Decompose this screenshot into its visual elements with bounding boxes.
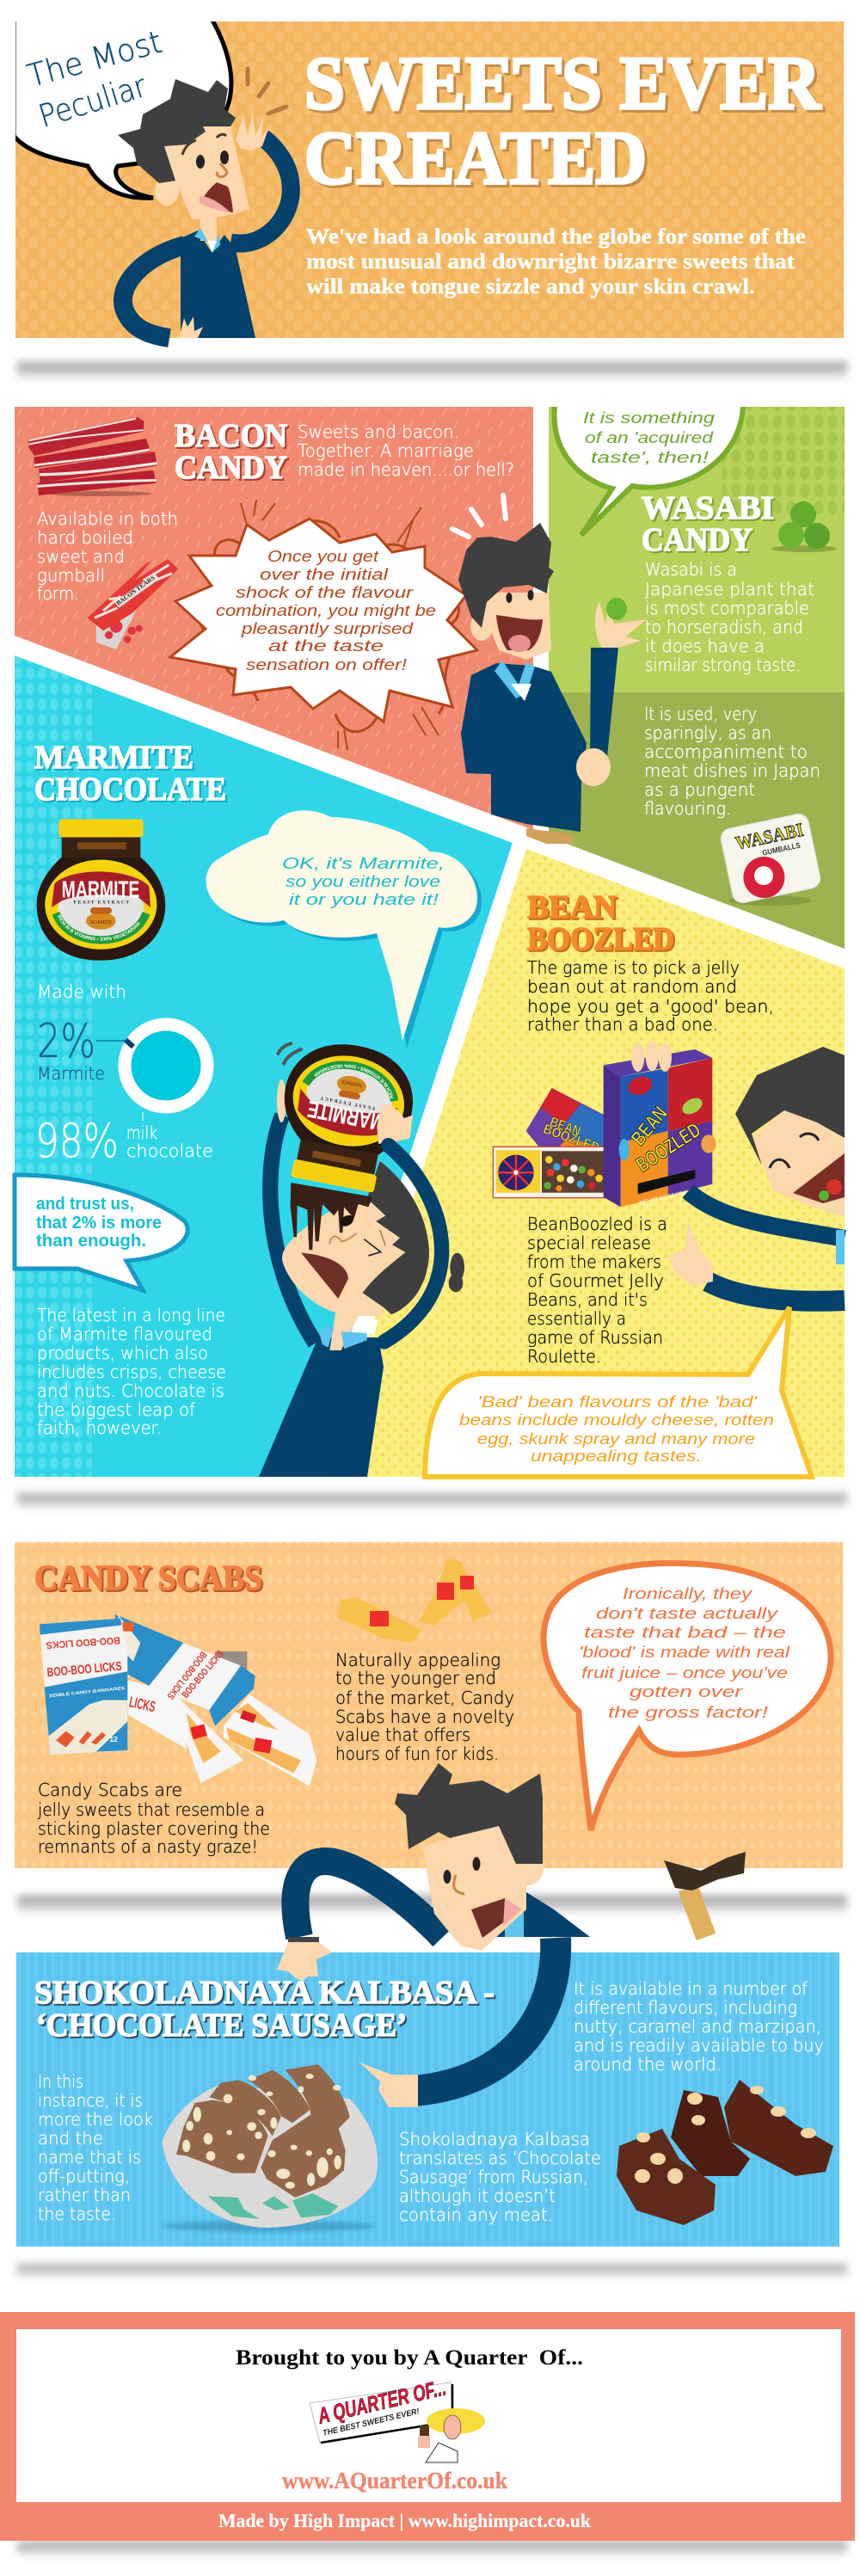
character: surprised man	[118, 79, 291, 338]
image: boo-boo licks box	[40, 1614, 316, 1786]
intro text: will make tongue sizzle and your skin crawl.	[306, 275, 755, 298]
text: latest in a long line	[37, 1305, 226, 1438]
image: inverted marmite jar	[284, 1044, 413, 1192]
heading: wasabi candy: WASABI	[642, 490, 774, 526]
text: available in flavours: around the world.	[574, 2054, 722, 2075]
stat: 98 percent milk chocolate	[35, 1114, 213, 1168]
game tray	[493, 1147, 606, 1198]
text: available in flavours: and is readily available to buy	[574, 2035, 824, 2056]
shadow: header panel	[17, 362, 847, 381]
image: inverted marmite jar: YEAST EXTRACT	[320, 1095, 376, 1110]
image: boo-boo licks box: BOO-BOO LICKS	[164, 1649, 208, 1701]
panel: candy scabs	[15, 1542, 843, 1868]
heading: bacon candy	[175, 418, 287, 486]
text: wasabi description: similar strong taste.	[645, 655, 801, 675]
label: the most: The Most	[24, 25, 166, 95]
text: candy scabs are: Candy Scabs are	[38, 1780, 182, 1800]
text: beanboozled special release: Beans, and it's	[527, 1289, 648, 1310]
image: boo-boo licks box: 12	[109, 1735, 118, 1743]
credit: made by high impact: Made by High Impact | www.highimpact.co.uk	[218, 2510, 592, 2531]
text: available in both: hard boiled	[37, 527, 133, 548]
text: shokoladnaya translation: translates as ‘Chocolate	[399, 2148, 601, 2168]
text: beanboozled special release	[527, 1214, 667, 1367]
panel: header	[14, 17, 844, 338]
text: shokoladnaya translation	[399, 2129, 601, 2225]
panel: bacon candy background	[15, 407, 533, 830]
text: made with: Made with	[37, 981, 126, 1002]
text: wasabi description: Wasabi is a	[645, 559, 737, 580]
tall box: BEAN	[627, 1103, 673, 1150]
callout: marmite cloud	[206, 810, 482, 1048]
text: available in both: Available in both	[37, 508, 178, 529]
text: candy scabs are: sticking plaster covering the	[38, 1818, 270, 1839]
text: in this instance: the taste.	[38, 2204, 116, 2224]
text: naturally appealing: hours of fun for kids.	[335, 1743, 499, 1764]
small box: BOOZLED	[541, 1122, 601, 1156]
text: latest in a long line: faith, however.	[37, 1417, 162, 1438]
tall box: BOOZLED	[632, 1118, 705, 1177]
text: available in flavours	[574, 1978, 824, 2075]
callout: ironically	[544, 1564, 831, 1830]
text: the game is	[527, 957, 774, 1035]
image: boo-boo licks box: BOO-BOO LICKS	[46, 1660, 122, 1680]
heading: bean boozled: BOOZLED	[527, 921, 674, 957]
heading: brought to you by: Brought to you by A Quarter Of...	[236, 2346, 583, 2370]
callout: starburst once you get over	[170, 500, 477, 750]
image: wasabi peas	[771, 501, 837, 552]
text: available in both: sweet and	[37, 546, 125, 567]
shadow: comic panel	[17, 1494, 847, 1509]
callout: ironically: the gross factor!	[608, 1704, 768, 1721]
text: in this instance	[38, 2071, 153, 2224]
text: the game is: hope you get a 'good' bean,	[527, 996, 774, 1017]
icon: shock lines	[248, 69, 286, 114]
gray interior	[215, 1651, 247, 1671]
logo: a quarter of: A QUARTER OF...	[315, 2374, 448, 2429]
text: latest in a long line: includes crisps, cheese	[37, 1362, 226, 1382]
callout: ironically: fruit juice – once you've	[581, 1664, 788, 1681]
image: marmite jar: YEAST EXTRACT	[73, 901, 129, 906]
right leg	[688, 1888, 706, 1937]
text: wasabi usage	[644, 704, 820, 819]
text: shokoladnaya translation: contain any meat.	[399, 2204, 553, 2225]
heading: bacon candy: CANDY	[175, 450, 287, 486]
text: naturally appealing	[335, 1650, 514, 1764]
text: naturally appealing: Naturally appealing	[335, 1650, 501, 1670]
text: in this instance: and the	[38, 2128, 103, 2149]
image: wasabi gumballs tin: GUMBALLS	[761, 841, 802, 858]
chart: 2 percent donut	[96, 1024, 207, 1121]
title	[304, 42, 821, 200]
text: the game is: The game is to pick a jelly	[527, 957, 740, 978]
callout: and trust us	[15, 1175, 187, 1290]
text: sweets and bacon: made in heaven....or hell?	[298, 459, 514, 480]
callout: bad bean flavours: 'Bad' bean flavours of the 'bad'	[477, 1393, 758, 1411]
shadow: footer panel	[17, 2542, 847, 2557]
icon: excitement lines	[452, 495, 506, 537]
image: marmite jar: MARMITE	[62, 876, 139, 902]
text: latest in a long line: and nuts. Chocolate is	[37, 1380, 224, 1401]
heading: bean boozled: BEAN	[527, 889, 617, 925]
callout: bad bean flavours: egg, skunk spray and many more	[477, 1430, 755, 1448]
text: beanboozled special release: essentially a	[527, 1308, 626, 1329]
title: CREATED	[304, 117, 647, 200]
callout: starburst once you get over: Once you get	[267, 548, 379, 565]
heading: shokoladnaya kalbasa	[34, 1975, 494, 2044]
label: peculiar: Peculiar	[35, 69, 150, 135]
text: sweets and bacon: Together. A marriage	[298, 440, 474, 461]
text: beanboozled special release: special release	[527, 1233, 651, 1253]
callout: acquired taste	[555, 407, 743, 535]
text: wasabi usage: meat dishes in Japan	[644, 760, 820, 781]
heading: bean boozled	[527, 889, 674, 957]
heading: wasabi candy: CANDY	[642, 522, 752, 558]
callout: marmite cloud: so you either love	[286, 873, 440, 890]
text: wasabi usage: accompaniment to	[644, 741, 808, 762]
image: wasabi gumballs tin: WASABI	[734, 819, 805, 854]
text: latest in a long line: the biggest leap of	[37, 1399, 195, 1420]
text: naturally appealing: Scabs have a novelty	[335, 1706, 514, 1727]
callout: starburst once you get over: shock of the flavour	[236, 584, 414, 601]
small box: BEAN	[548, 1115, 582, 1140]
text: beanboozled special release: from the makers	[527, 1251, 661, 1272]
text: wasabi usage: as a pungent	[644, 779, 755, 800]
text: candy scabs are: remnants of a nasty graze!	[38, 1836, 258, 1857]
character: pointing man	[277, 1763, 746, 2107]
image: inverted marmite jar: MARMITE	[305, 1096, 387, 1136]
back box	[127, 1680, 187, 1749]
panel: marmite chocolate background	[15, 655, 513, 1477]
text: wasabi usage: It is used, very	[644, 704, 757, 724]
callout: ironically: Ironically, they	[623, 1585, 752, 1602]
intro text: We've had a look around the globe for some of the	[306, 225, 806, 249]
image: wasabi gumballs tin	[719, 812, 822, 906]
shadow: candy scabs panel	[17, 1896, 847, 1915]
callout: bad bean flavours: beans include mouldy cheese, rotten	[459, 1411, 774, 1429]
callout: bad bean flavours	[425, 1307, 812, 1477]
callout: marmite cloud: it or you hate it!	[289, 891, 439, 908]
character: man pouring marmite on head	[259, 1042, 464, 1477]
image: marmite jar: RICH IN B VITAMINS • 100% VEGETARIAN	[57, 915, 140, 941]
intro text	[306, 225, 806, 298]
text: available in both	[37, 508, 178, 604]
text: available in flavours: nutty, caramel and marzipan,	[574, 2016, 821, 2037]
packets	[175, 1694, 243, 1783]
text: latest in a long line: of Marmite flavoured	[37, 1324, 212, 1344]
heading: marmite chocolate	[34, 740, 226, 808]
text: available in both: form.	[37, 583, 79, 604]
text: sweets and bacon	[298, 421, 514, 480]
text: in this instance: name that is	[38, 2147, 141, 2167]
image: inverted marmite jar: RICH IN B VITAMINS • 100% VEGETARIAN	[314, 1064, 394, 1099]
panel: wasabi candy background	[549, 407, 845, 950]
text: wasabi description	[645, 559, 814, 675]
callout: ironically: 'blood' is made with real	[579, 1644, 790, 1661]
character: laughing man with pea	[458, 523, 647, 844]
callout: starburst once you get over: pleasantly surprised	[241, 620, 414, 637]
callout: acquired taste: of an 'acquired	[585, 429, 714, 446]
text: naturally appealing: to the younger end	[335, 1668, 496, 1688]
callout: bad bean flavours: unappealing tastes.	[531, 1448, 702, 1465]
callout: starburst once you get over: at the taste	[268, 637, 384, 655]
image: marmite jar	[36, 819, 165, 961]
callout: and trust us: and trust us,	[36, 1195, 134, 1214]
image: sliced chocolate sausage	[617, 2080, 833, 2225]
text: naturally appealing: value that offers	[335, 1725, 470, 1745]
image: boo-boo licks box: BOO-BOO LICKS	[181, 1649, 226, 1700]
image: boo-boo licks box: BOO-BOO LICKS	[46, 1634, 120, 1650]
image: bacon rashers	[28, 417, 157, 496]
text: available in flavours: different flavours, including	[574, 1997, 797, 2018]
callout: marmite cloud: OK, it's Marmite,	[282, 855, 445, 872]
front box	[40, 1619, 127, 1755]
callout: and trust us: that 2% is more	[36, 1214, 162, 1233]
shadow: chocolate sausage panel	[17, 2265, 847, 2278]
panel: footer	[0, 2312, 855, 2541]
callout: starburst once you get over: over the initial	[260, 566, 389, 583]
panel: bean boozled background	[323, 849, 845, 1477]
text: the game is: rather than a bad one.	[527, 1014, 718, 1035]
image: jelly belly bean boozled boxes	[493, 1042, 716, 1207]
heading: wasabi candy	[642, 490, 774, 558]
text: available in flavours: It is available in a number of	[574, 1978, 808, 1999]
small box	[526, 1088, 608, 1159]
image: candy scab sweets	[337, 1559, 491, 1643]
text: sweets and bacon: Sweets and bacon.	[298, 421, 459, 442]
callout: starburst once you get over: sensation on offer!	[246, 656, 407, 673]
callout: acquired taste: It is something	[583, 409, 715, 427]
image: plate of chocolate sausage	[162, 2064, 378, 2232]
text: wasabi description: Japanese plant that	[645, 579, 814, 599]
intro text: most unusual and downright bizarre sweets that	[306, 250, 796, 274]
image: bacon candy pack: BACON TEARS	[114, 574, 157, 607]
text: in this instance: In this	[38, 2071, 83, 2092]
image: marmite jar: MARMITE	[90, 920, 112, 925]
callout: ironically: gotten over	[630, 1683, 743, 1700]
tall box	[604, 1049, 716, 1207]
text: in this instance: instance, it is	[38, 2090, 143, 2111]
title: SWEETS EVER	[304, 42, 821, 126]
logo: a quarter of	[310, 2374, 485, 2462]
text: in this instance: more the look	[38, 2109, 153, 2130]
callout: starburst once you get over: combination, you might be	[216, 602, 436, 619]
heading: shokoladnaya kalbasa: SHOKOLADNAYA KALBASA -	[34, 1975, 494, 2011]
logo: a quarter of: THE BEST SWEETS EVER!	[322, 2407, 421, 2438]
shoe	[664, 1852, 746, 1891]
heading: marmite chocolate: CHOCOLATE	[34, 772, 226, 808]
text: candy scabs are	[37, 1780, 270, 1857]
text: latest in a long line: products, which also	[37, 1343, 208, 1363]
text: beanboozled special release: BeanBoozled is a	[527, 1214, 667, 1234]
text: wasabi description: to horseradish, and	[645, 617, 803, 637]
heading: candy scabs: CANDY SCABS	[34, 1558, 262, 1597]
tall box: NET WT 1.6 OZ (45g)	[639, 1190, 688, 1206]
text: shokoladnaya translation: although it doesn’t	[399, 2186, 556, 2206]
text: wasabi usage: sparingly, as an	[644, 722, 771, 743]
callout: ironically: don't taste actually	[596, 1605, 778, 1622]
text: candy scabs are: jelly sweets that resemble a	[37, 1799, 265, 1820]
stat: 2 percent marmite: 2%	[37, 1014, 95, 1068]
stat: 2 percent marmite: Marmite	[37, 1063, 105, 1084]
text: beanboozled special release: game of Russian	[527, 1327, 663, 1348]
text: shokoladnaya translation: Sausage’ from Russian,	[399, 2167, 588, 2187]
character: laughing boy eating beans	[669, 1047, 845, 1301]
image: bacon candy pack	[88, 559, 178, 649]
stat: 98 percent milk chocolate: milk	[126, 1122, 157, 1143]
fingers	[631, 1042, 672, 1072]
text: latest in a long line: The latest in a long line	[37, 1305, 225, 1325]
image: boo-boo licks box: EDIBLE CANDY BANDAGES	[49, 1686, 126, 1699]
text: wasabi description: is most comparable	[645, 598, 809, 618]
image: inverted marmite jar: MARMITE	[341, 1079, 363, 1087]
stat: 98 percent milk chocolate: 98%	[35, 1114, 119, 1168]
image: boo-boo licks box: LICKS	[127, 1693, 157, 1715]
speech bubble: the most peculiar	[14, 17, 231, 198]
text: available in both: gumball	[37, 565, 105, 586]
stat: 98 percent milk chocolate: chocolate	[126, 1140, 213, 1161]
heading: bacon candy: BACON	[175, 418, 287, 454]
callout: ironically: taste that bad – the	[584, 1624, 786, 1641]
text: beanboozled special release: of Gourmet Jelly	[527, 1270, 664, 1291]
text: beanboozled special release: Roulette.	[527, 1346, 601, 1367]
text: in this instance: off-putting,	[38, 2166, 130, 2186]
link: www.aquarterof.co.uk: www.AQuarterOf.co.uk	[282, 2468, 507, 2493]
text: naturally appealing: of the market, Candy	[335, 1688, 514, 1708]
callout: acquired taste: taste', then!	[591, 449, 709, 466]
text: wasabi usage: flavouring.	[644, 798, 731, 819]
heading: shokoladnaya kalbasa: ‘CHOCOLATE SAUSAGE’	[36, 2007, 407, 2044]
text: the game is: bean out at random and	[527, 976, 737, 997]
text: in this instance: rather than	[38, 2185, 131, 2205]
text: shokoladnaya translation: Shokoladnaya Kalbasa	[399, 2129, 590, 2149]
heading: marmite chocolate: MARMITE	[34, 740, 194, 776]
text: wasabi description: it does have a	[645, 636, 765, 656]
panel: chocolate sausage	[16, 1952, 839, 2247]
callout: and trust us: than enough.	[36, 1232, 146, 1251]
